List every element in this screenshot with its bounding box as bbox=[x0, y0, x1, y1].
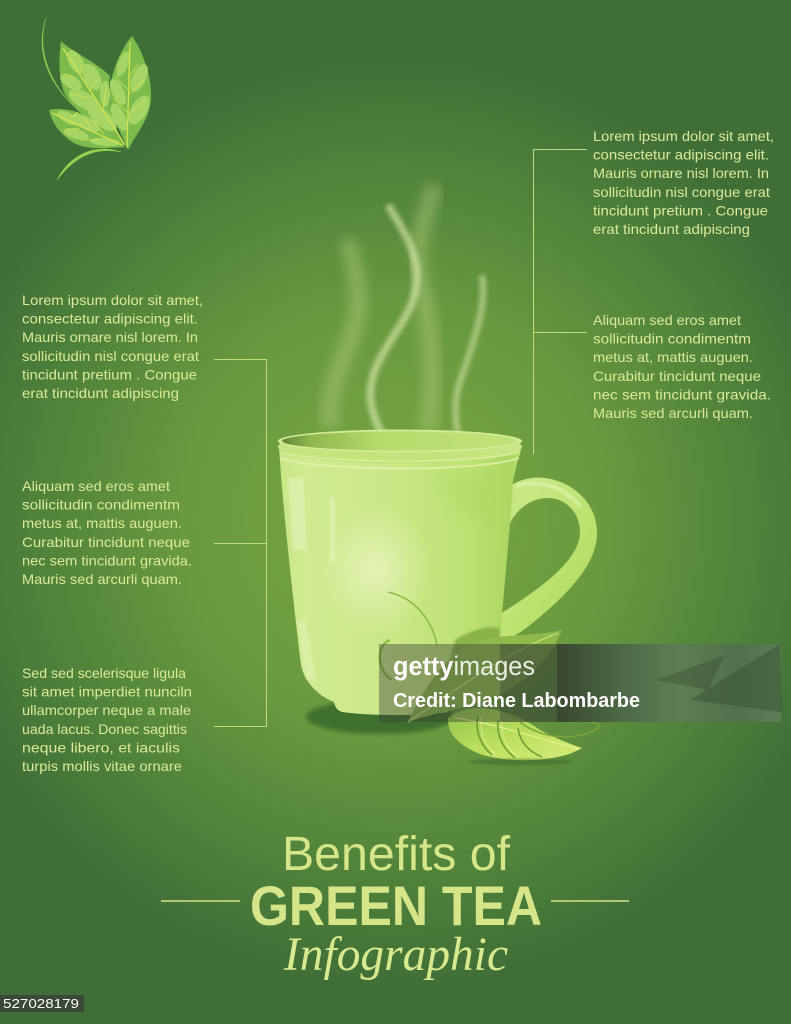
text block: right top: tincidunt pretium . Congue bbox=[593, 202, 768, 218]
text block: left bottom: ullamcorper neque a male bbox=[22, 702, 191, 718]
stock id tag bbox=[0, 995, 84, 1012]
text block: left top: sollicitudin nisl congue erat bbox=[22, 348, 199, 364]
cup shadow bbox=[306, 700, 454, 734]
stock id tag: 527028179 bbox=[3, 996, 79, 1011]
text block: right top: consectetur adipiscing elit. bbox=[593, 147, 769, 163]
text block: right middle: sollicitudin condimentm bbox=[593, 331, 751, 347]
text block: left top: erat tincidunt adipiscing bbox=[22, 385, 179, 401]
text block: right middle: metus at, mattis auguen. bbox=[593, 349, 753, 365]
text block: right top: sollicitudin nisl congue erat bbox=[593, 184, 770, 200]
text block: right top: erat tincidunt adipiscing bbox=[593, 221, 750, 237]
text block: right middle: nec sem tincidunt gravida. bbox=[593, 386, 771, 402]
connector: left bracket bbox=[214, 360, 266, 726]
text block: right middle: Aliquam sed eros amet bbox=[593, 312, 741, 328]
green tea cup bbox=[278, 430, 597, 715]
text block: left middle: sollicitudin condimentm bbox=[22, 497, 180, 513]
text block: left bottom: sit amet imperdiet nunciln bbox=[22, 684, 192, 700]
title: GREEN TEA bbox=[250, 874, 542, 937]
text block: left top: consectetur adipiscing elit. bbox=[22, 311, 198, 327]
text block: left middle: Mauris sed arcurli quam. bbox=[22, 571, 182, 587]
text block: right middle: Curabitur tincidunt neque bbox=[593, 368, 761, 384]
back leaf bbox=[408, 630, 562, 722]
text block: left bottom: turpis mollis vitae ornare bbox=[22, 758, 182, 774]
text block: right top: Mauris ornare nisl lorem. In bbox=[593, 165, 769, 181]
title: Benefits of bbox=[282, 828, 511, 881]
watermark banner bbox=[379, 644, 782, 722]
cup body bbox=[279, 450, 521, 715]
connector: right bracket bbox=[534, 150, 587, 454]
text block: left bottom: Sed sed scelerisque ligula bbox=[22, 665, 186, 681]
front leaf bbox=[448, 708, 582, 760]
cup handle bbox=[494, 478, 597, 638]
text block: left top: Mauris ornare nisl lorem. In bbox=[22, 329, 198, 345]
watermark banner: Credit: Diane Labombarbe bbox=[393, 690, 640, 712]
text block: left middle: Curabitur tincidunt neque bbox=[22, 534, 190, 550]
steam rising from cup bbox=[330, 185, 483, 442]
text block: left middle: nec sem tincidunt gravida. bbox=[22, 552, 192, 568]
tea leaves beside cup bbox=[380, 592, 600, 765]
reflected window highlights bbox=[288, 478, 307, 550]
text block: left top: Lorem ipsum dolor sit amet, bbox=[22, 292, 203, 308]
text block: left bottom: neque libero, et iaculis bbox=[22, 739, 180, 755]
text block: right middle: Mauris sed arcurli quam. bbox=[593, 405, 753, 421]
text block: left middle: Aliquam sed eros amet bbox=[22, 478, 170, 494]
leaf lobes bbox=[55, 47, 154, 147]
watermark banner: gettyimages bbox=[393, 651, 535, 681]
text block: right top: Lorem ipsum dolor sit amet, bbox=[593, 128, 774, 144]
title: Infographic bbox=[283, 928, 508, 981]
text block: left top: tincidunt pretium . Congue bbox=[22, 366, 197, 382]
cup rim bbox=[278, 430, 522, 464]
icon: tea leaves sprig bbox=[42, 18, 154, 180]
text block: left bottom: uada lacus. Donec sagittis bbox=[22, 721, 187, 737]
title bbox=[161, 828, 629, 981]
text block: left middle: metus at, mattis auguen. bbox=[22, 515, 182, 531]
